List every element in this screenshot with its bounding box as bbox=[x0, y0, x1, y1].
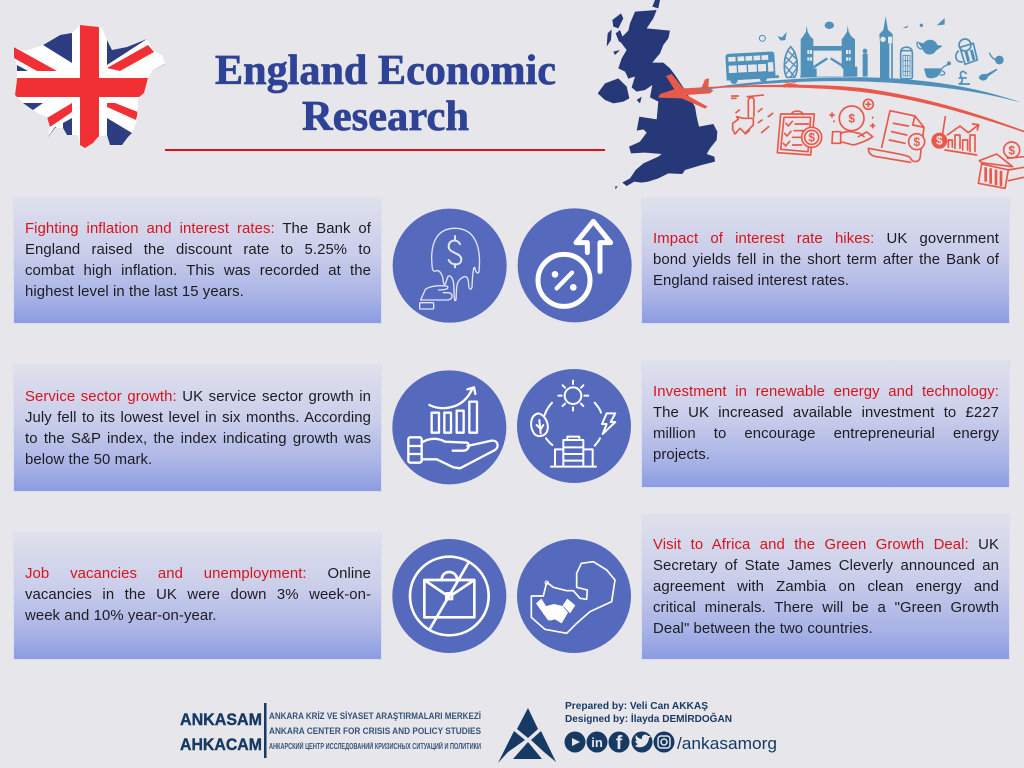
illustration: finance icons under red arc: $ bbox=[913, 135, 920, 149]
icon: renewable energy cycle bbox=[517, 369, 631, 483]
panel: service sector growth bbox=[14, 365, 381, 491]
text: fighting inflation: combat high inflation. This was recorded at the bbox=[25, 263, 371, 279]
icon: bank with coin bbox=[978, 154, 1013, 188]
teacup bbox=[924, 68, 942, 78]
illustration: finance icons under red arc: $ bbox=[936, 134, 943, 148]
gherkin bbox=[784, 47, 797, 77]
text: renewable investment bbox=[653, 384, 999, 463]
icon: percent with up arrow bbox=[518, 208, 632, 322]
teapot handle and spoon stem bbox=[917, 42, 999, 75]
guard bbox=[863, 49, 867, 53]
icon: rising bar chart bbox=[943, 117, 979, 155]
title: England Economic bbox=[215, 48, 556, 94]
teapot bbox=[917, 40, 943, 55]
icon: no briefcase bbox=[392, 539, 506, 653]
title: Research bbox=[302, 94, 469, 140]
illustration: finance icons under red arc: $ bbox=[848, 112, 855, 126]
text: job vacancies: week and 10% year-on-year. bbox=[25, 608, 217, 624]
tower bridge bbox=[800, 25, 857, 78]
text: green growth deal: critical minerals. There will be a "Green Growth bbox=[653, 600, 999, 616]
text: job vacancies bbox=[25, 566, 371, 624]
panel: renewable investment bbox=[642, 361, 1009, 487]
icons: social media: in bbox=[591, 735, 603, 750]
text: service sector growth: Service sector growth: UK service sector growth in bbox=[25, 389, 371, 405]
panel: job vacancies bbox=[14, 533, 381, 659]
text: renewable investment: projects. bbox=[653, 447, 710, 463]
icon: hand with growth chart bbox=[392, 370, 506, 484]
text: green growth deal: agreement with Zambia on clean energy and bbox=[653, 579, 999, 595]
icon: spyglass person on arrow bbox=[732, 95, 763, 134]
illustration: finance icons under red arc bbox=[700, 85, 1024, 188]
text: social handle: /ankasamorg bbox=[677, 734, 777, 753]
text: fighting inflation: highest level in the last 15 years. bbox=[25, 284, 244, 300]
text: service sector growth: to the S&P index, the index indicating growth was bbox=[25, 431, 371, 447]
logo: triangle emblem bbox=[498, 708, 556, 763]
icon: bill document bbox=[868, 111, 924, 162]
text: credits: Designed by: İlayda DEMİRDOĞAN bbox=[565, 712, 732, 725]
squiggle spoon bbox=[947, 61, 951, 65]
text: job vacancies: Job vacancies and unemployment: Online bbox=[25, 566, 371, 582]
icons: social media: f bbox=[616, 733, 623, 754]
text: interest rate hikes: bond yields fell in the short term after the Bank of bbox=[653, 252, 999, 268]
text: service sector growth: July fell to its lowest level in six months. According bbox=[25, 410, 371, 426]
icon: clipboard checklist bbox=[777, 111, 814, 155]
text: job vacancies: vacancies in the UK were down 3% week-on- bbox=[25, 587, 371, 603]
pound sign bbox=[959, 71, 970, 84]
text: green growth deal: Visit to Africa and the Green Growth Deal: UK bbox=[653, 537, 999, 553]
tower bridge chevron deck bbox=[813, 58, 845, 67]
text: service sector growth: below the 50 mark. bbox=[25, 452, 152, 468]
text: credits: Prepared by: Veli Can AKKAŞ bbox=[565, 701, 708, 712]
text: green growth deal: Secretary of State James Cleverly announced an bbox=[653, 558, 999, 574]
text: credits bbox=[565, 701, 732, 725]
big ben bbox=[879, 16, 893, 78]
logo: ANKASAM wordmark: АНКАРСКИЙ ЦЕНТР ИССЛЕДОВАНИЙ КРИЗИСНЫХ СИТУАЦИЙ И ПОЛИТИКИ bbox=[269, 742, 481, 751]
icon: hand holding coin bbox=[839, 106, 864, 131]
text: renewable investment: The UK increased available investment to £227 bbox=[653, 405, 999, 421]
panel: interest rate hikes bbox=[642, 198, 1009, 323]
text: renewable investment: Investment in renewable energy and technology: bbox=[653, 384, 999, 400]
guitar bbox=[979, 69, 997, 81]
illustration: London landmarks skyline bbox=[697, 16, 1020, 102]
illustration: finance icons under red arc: $ bbox=[1008, 143, 1015, 157]
map: United Kingdom and Ireland bbox=[598, 0, 717, 189]
text: fighting inflation: Fighting inflation and interest rates: The Bank of bbox=[25, 221, 371, 237]
text: green growth deal bbox=[653, 537, 999, 637]
swoosh: red arc bbox=[700, 85, 1024, 132]
title underline bbox=[165, 149, 605, 151]
text: fighting inflation: England raised the discount rate to 5.25% to bbox=[25, 242, 371, 258]
illustration: finance icons under red arc: $ bbox=[808, 131, 815, 145]
title bbox=[215, 48, 556, 140]
text: interest rate hikes: Impact of interest rate hikes: UK government bbox=[653, 231, 999, 247]
logo: ANKASAM wordmark: AHKACAM bbox=[180, 735, 262, 754]
icon: Zambia map with handshake bbox=[517, 539, 631, 653]
text: fighting inflation bbox=[25, 221, 371, 300]
icon: union jack flag map bbox=[14, 25, 165, 148]
small flag at arc bbox=[783, 81, 797, 88]
panel: fighting inflation bbox=[14, 198, 381, 323]
text: interest rate hikes: England raised interest rates. bbox=[653, 273, 849, 289]
text: interest rate hikes bbox=[653, 231, 999, 289]
icon: melting dollar over hand bbox=[393, 209, 507, 323]
icon: airplane bbox=[658, 74, 713, 109]
logo: ANKASAM wordmark bbox=[180, 703, 481, 758]
logo: ANKASAM wordmark: ANKARA KRİZ VE SİYASET ARAŞTIRMALARI MERKEZİ bbox=[269, 711, 481, 721]
icons: social media bbox=[564, 732, 674, 754]
panel: green growth deal bbox=[642, 515, 1009, 659]
text: green growth deal: Deal" between the two countries. bbox=[653, 621, 873, 637]
swoosh: blue arc bbox=[697, 77, 1020, 102]
text: service sector growth bbox=[25, 389, 371, 468]
text: renewable investment: million to encourage entrepreneurial energy bbox=[653, 426, 999, 442]
beer mug bbox=[956, 43, 977, 64]
logo: ANKASAM wordmark: ANKARA CENTER FOR CRISIS AND POLICY STUDIES bbox=[269, 726, 481, 736]
logo: ANKASAM wordmark: ANKASAM bbox=[180, 710, 262, 729]
bus bbox=[725, 51, 779, 81]
phone box bbox=[901, 51, 912, 79]
